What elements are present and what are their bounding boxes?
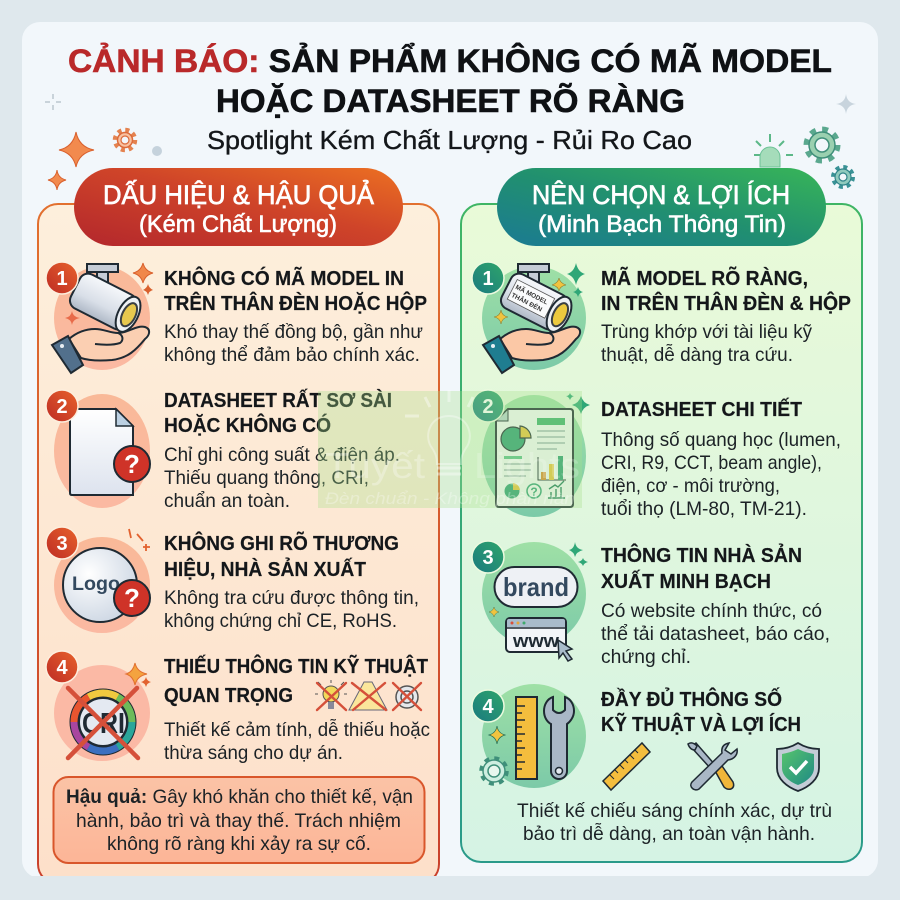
icon: crossed-out CRI ring — [54, 663, 151, 762]
text block: không chứng chỉ CE, RoHS. — [164, 610, 397, 632]
heading pill: right: NÊN CHỌN & LỢI ÍCH — [532, 179, 790, 210]
title — [68, 41, 832, 119]
icon: unknown logo with question mark: ? — [124, 583, 140, 613]
heading: XUẤT MINH BẠCH — [601, 570, 771, 593]
left item 1 — [46, 262, 427, 373]
text block: Thiết kế chiếu sáng chính xác, dự trù — [517, 800, 832, 822]
text block — [164, 321, 423, 366]
badge 2: 2 — [482, 396, 494, 418]
sparkles — [566, 393, 590, 414]
icon: brand pill and website window: brand — [503, 572, 569, 602]
text block: Thiết kế cảm tính, dễ thiếu hoặc — [164, 718, 430, 741]
decorative icons: left — [45, 94, 162, 190]
heading pill: right — [497, 168, 826, 246]
heading: THIẾU THÔNG TIN KỸ THUẬT — [164, 654, 428, 678]
callout: consequences — [54, 777, 424, 863]
text block: Chỉ ghi công suất & điện áp. — [164, 444, 400, 466]
badge 4: 4 — [56, 657, 68, 679]
text block: Trùng khớp với tài liệu kỹ — [601, 321, 812, 343]
heading pill: left — [74, 168, 403, 246]
icon: labelled spotlight on hand: MÃ MODEL — [514, 282, 550, 306]
badge 3: 3 — [482, 547, 494, 569]
right item 4 — [472, 684, 832, 845]
badge 2: 2 — [56, 396, 68, 418]
text block — [517, 800, 832, 845]
heading — [164, 654, 428, 707]
heading — [601, 266, 851, 315]
text block — [164, 444, 400, 512]
icon: detailed datasheet — [482, 395, 586, 517]
icon: labelled spotlight on hand — [482, 263, 586, 373]
watermark: Đèn chuẩn - Không phàn nàn — [325, 489, 575, 508]
icon: crossed screwdriver and wrench — [688, 743, 737, 790]
badge 4 — [472, 690, 504, 722]
icon: shield with check — [777, 743, 819, 791]
icon: unknown logo with question mark — [54, 529, 150, 633]
icon: detailed datasheet: ? — [530, 485, 538, 499]
text block: bảo trì dễ dàng, an toàn vận hành. — [523, 822, 815, 845]
heading pill: left: DẤU HIỆU & HẬU QUẢ — [103, 178, 374, 210]
text block: tuổi thọ (LM-80, TM-21). — [601, 498, 807, 520]
heading: QUAN TRỌNG — [164, 684, 293, 707]
badge 3 — [46, 527, 78, 559]
text block: thuật, dễ dàng tra cứu. — [601, 343, 793, 366]
text block — [164, 718, 430, 764]
heading: DATASHEET CHI TIẾT — [601, 398, 802, 421]
badge 1: 1 — [482, 268, 494, 290]
right item 2 — [472, 390, 841, 520]
heading — [164, 266, 427, 315]
heading: THÔNG TIN NHÀ SẢN — [601, 543, 802, 567]
title: CẢNH BÁO: SẢN PHẨM KHÔNG CÓ MÃ MODEL — [68, 41, 832, 79]
badge 4 — [46, 651, 78, 683]
callout: consequences: Hậu quả: Gây khó khăn cho thiết kế, vận — [66, 786, 413, 808]
left item 4 — [46, 651, 430, 764]
watermark — [318, 390, 582, 508]
heading: MÃ MODEL RÕ RÀNG, — [601, 266, 808, 290]
heading: ĐẦY ĐỦ THÔNG SỐ — [601, 687, 782, 711]
text block: Thông số quang học (lumen, — [601, 429, 841, 451]
heading — [601, 543, 802, 593]
heading — [164, 531, 399, 581]
title: HOẶC DATASHEET RÕ RÀNG — [216, 82, 685, 119]
heading: KHÔNG CÓ MÃ MODEL IN — [164, 266, 404, 290]
badge 4: 4 — [482, 696, 494, 718]
text block: chứng chỉ. — [601, 646, 691, 668]
icon: unknown logo with question mark: Logo — [72, 573, 120, 595]
watermark: Tuyết — [325, 445, 425, 486]
text block: Khó thay thế đồng bộ, gần như — [164, 321, 423, 343]
icon: diagonal ruler — [603, 743, 650, 790]
text block: Không tra cứu được thông tin, — [164, 587, 419, 609]
text block: thể tải datasheet, báo cáo, — [601, 623, 830, 645]
heading pill: left: (Kém Chất Lượng) — [139, 211, 337, 238]
icons: crossed-out bulb, beam and dial — [315, 680, 421, 710]
badge 1: 1 — [56, 268, 68, 290]
outer page strip below card — [22, 876, 878, 900]
callout: consequences: không rõ ràng khi xảy ra sự cố. — [107, 833, 371, 855]
right item 1 — [472, 262, 851, 373]
text block: thừa sáng cho dự án. — [164, 742, 343, 764]
icon: spotlight on hand, no model — [52, 263, 153, 373]
badge 2 — [472, 390, 504, 422]
heading pill: right: (Minh Bạch Thông Tin) — [538, 211, 786, 238]
heading: KỸ THUẬT VÀ LỢI ÍCH — [601, 712, 801, 736]
heading: TRÊN THÂN ĐÈN HOẶC HỘP — [164, 291, 427, 315]
badge 1 — [472, 262, 504, 294]
panel: left (warning signs and consequences) — [38, 204, 439, 884]
icon: brand pill and website window — [482, 542, 588, 661]
badge 3 — [472, 541, 504, 573]
left item 3 — [46, 527, 419, 633]
icon: brand pill and website window: www — [512, 631, 560, 651]
text block: Có website chính thức, có — [601, 600, 822, 622]
badge 3: 3 — [56, 533, 68, 555]
text block — [601, 429, 841, 520]
heading: HIỆU, NHÀ SẢN XUẤT — [164, 557, 366, 581]
heading — [601, 687, 801, 736]
icon: blank document with question mark: ? — [124, 449, 140, 479]
watermark: Lights — [474, 445, 580, 486]
icon: labelled spotlight on hand: THÂN ĐÈN — [510, 290, 544, 314]
heading: HOẶC KHÔNG CÓ — [164, 413, 331, 437]
icon: crossed-out CRI ring: CRI — [82, 708, 125, 740]
text block — [601, 600, 830, 668]
callout: consequences: hành, bảo trì và thay thế. Trách nhiệm — [76, 810, 401, 832]
badge 2 — [46, 390, 78, 422]
text block — [601, 321, 812, 366]
text block: Thiếu quang thông, CRI, — [164, 467, 369, 489]
icon: blank document with question mark — [54, 394, 150, 508]
heading: DATASHEET RẤT SƠ SÀI — [164, 389, 392, 412]
text block: không thể đảm bảo chính xác. — [164, 344, 420, 366]
heading: KHÔNG GHI RÕ THƯƠNG — [164, 531, 399, 555]
badge 1 — [46, 262, 78, 294]
text block: chuẩn an toàn. — [164, 490, 290, 512]
icon: ruler, wrench and gear — [482, 684, 586, 788]
right item 3 — [472, 541, 830, 668]
subtitle: Spotlight Kém Chất Lượng - Rủi Ro Cao — [207, 125, 692, 155]
heading — [164, 389, 392, 437]
heading: IN TRÊN THÂN ĐÈN & HỘP — [601, 291, 851, 315]
text block: điện, cơ - môi trường, — [601, 475, 780, 497]
text block — [164, 587, 419, 632]
decorative icons: right — [754, 94, 856, 187]
text block: CRI, R9, CCT, beam angle), — [601, 452, 822, 474]
left item 2 — [46, 389, 400, 512]
panel: right (what to choose and benefits) — [461, 204, 862, 862]
